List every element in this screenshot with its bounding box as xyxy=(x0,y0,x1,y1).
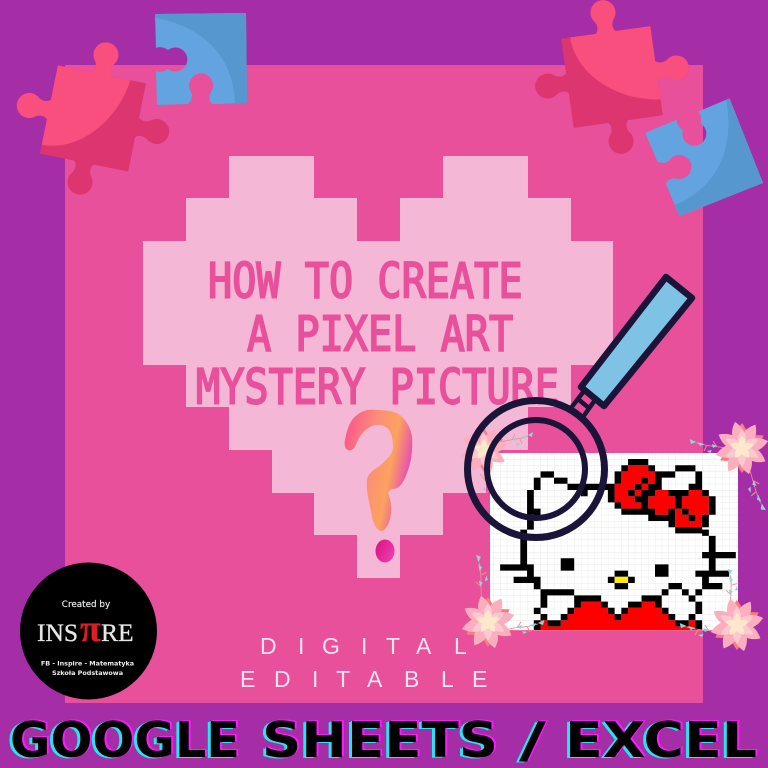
logo badge xyxy=(20,562,157,700)
decoration: flower bottom right xyxy=(680,569,768,657)
title: HOW TO CREATE xyxy=(208,254,523,309)
decoration: flower top right xyxy=(690,416,768,512)
title xyxy=(196,254,559,415)
logo badge: FB - Inspire - Matematyka xyxy=(41,660,134,668)
footer heading: GOOGLE xyxy=(10,712,240,768)
text: digital editable xyxy=(240,633,487,692)
title: A PIXEL ART xyxy=(247,307,513,362)
logo badge: π xyxy=(80,608,101,650)
footer heading xyxy=(10,712,757,768)
footer heading: EXCEL xyxy=(565,712,757,768)
decoration: flower top left xyxy=(456,422,533,504)
decoration: flower bottom left xyxy=(456,555,544,654)
footer heading: / xyxy=(519,712,546,768)
title: MYSTERY PICTURE xyxy=(196,360,559,415)
puzzle piece: blue top right xyxy=(645,98,763,217)
text: digital editable: EDITABLE xyxy=(240,666,487,692)
pixel heart xyxy=(143,156,613,578)
logo badge: INS xyxy=(37,618,78,647)
pixel art picture: Hello Kitty xyxy=(490,453,738,639)
puzzle piece: blue top left xyxy=(155,13,247,105)
icon: question mark xyxy=(345,410,412,562)
puzzle piece: red top left xyxy=(16,42,170,195)
icon: magnifying glass xyxy=(468,277,692,538)
logo badge: Szkoła Podstawowa xyxy=(52,669,123,677)
puzzle piece: red top right xyxy=(535,0,689,154)
logo badge: RE xyxy=(101,618,134,647)
logo badge: Created by xyxy=(62,600,110,610)
text: digital editable: DIGITAL xyxy=(260,633,467,659)
footer heading: SHEETS xyxy=(262,712,498,768)
panel: pink square xyxy=(65,65,703,703)
